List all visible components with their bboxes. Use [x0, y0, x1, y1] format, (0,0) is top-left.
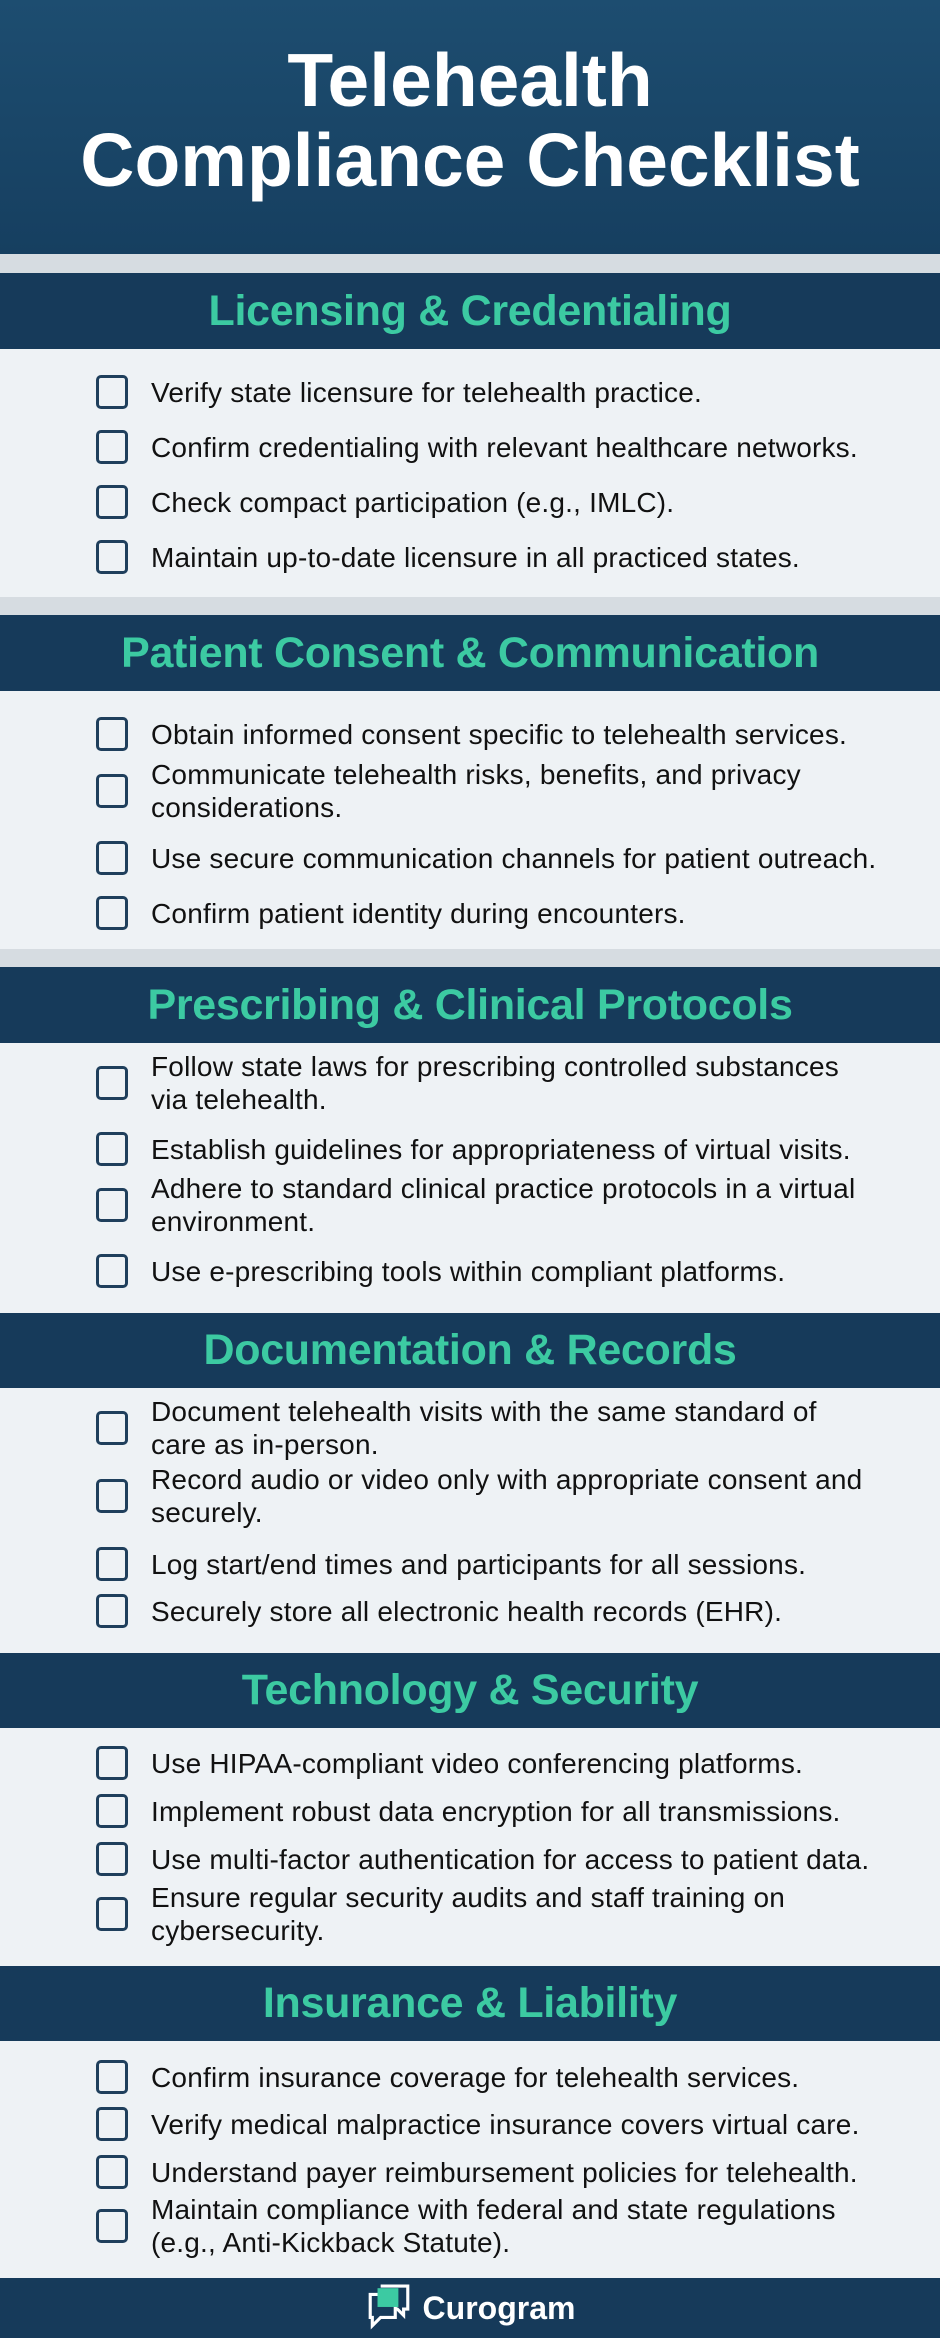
- item: considerations.: [151, 792, 342, 823]
- item: Adhere to standard clinical practice protocols in a virtual: [151, 1173, 855, 1204]
- panel: consent items: [0, 691, 940, 949]
- item: Use e-prescribing tools within compliant platforms.: [151, 1256, 785, 1286]
- header: Documentation & Records: Documentation & Records: [203, 1326, 737, 1374]
- header: Insurance & Liability: Insurance & Liability: [263, 1979, 677, 2027]
- item: Establish guidelines for appropriateness of virtual visits.: [151, 1134, 851, 1164]
- header: Patient Consent & Communication: Patient Consent & Communication: [121, 628, 819, 676]
- item: Check compact participation (e.g., IMLC).: [151, 486, 674, 518]
- header: Prescribing & Clinical Protocols: [0, 967, 940, 1043]
- item: Use HIPAA-compliant video conferencing platforms.: [151, 1748, 803, 1778]
- item: [96, 1464, 862, 1528]
- item: Implement robust data encryption for all transmissions.: [151, 1796, 841, 1826]
- item: Confirm credentialing with relevant healthcare networks.: [151, 432, 858, 462]
- header: Technology & Security: [0, 1653, 940, 1728]
- item: [96, 1051, 839, 1115]
- item: Maintain compliance with federal and state regulations: [151, 2194, 836, 2225]
- header: Patient Consent & Communication: [0, 615, 940, 691]
- panel: technology items: [0, 1728, 940, 1966]
- header: Licensing & Credentialing: [0, 273, 940, 349]
- panel: documentation items: [0, 1388, 940, 1653]
- item: Use multi-factor authentication for access to patient data.: [151, 1844, 869, 1874]
- title: Telehealth: [287, 38, 653, 122]
- header: Prescribing & Clinical Protocols: Prescribing & Clinical Protocols: [147, 980, 793, 1028]
- item: [96, 759, 801, 823]
- item: [96, 2194, 836, 2258]
- item: environment.: [151, 1206, 315, 1237]
- panel: licensing items: [0, 349, 940, 597]
- item: Document telehealth visits with the same standard of: [151, 1396, 817, 1427]
- title: Compliance Checklist: [80, 118, 860, 202]
- item: Communicate telehealth risks, benefits, and privacy: [151, 759, 801, 790]
- item: care as in-person.: [151, 1429, 379, 1460]
- panel: prescribing items: [0, 1043, 940, 1313]
- item: (e.g., Anti-Kickback Statute).: [151, 2227, 510, 2258]
- icon: chat logo: [368, 2284, 410, 2330]
- panel: insurance items: [0, 2041, 940, 2278]
- header: Insurance & Liability: [0, 1966, 940, 2041]
- item: Confirm insurance coverage for telehealth services.: [151, 2062, 799, 2092]
- item: [96, 1882, 785, 1946]
- item: Securely store all electronic health records (EHR).: [151, 1596, 782, 1626]
- item: via telehealth.: [151, 1084, 327, 1115]
- item: [96, 1173, 855, 1237]
- item: Record audio or video only with appropriate consent and: [151, 1464, 862, 1495]
- item: Maintain up-to-date licensure in all practiced states.: [151, 542, 800, 572]
- header: Licensing & Credentialing: Licensing & Credentialing: [209, 286, 731, 334]
- item: Confirm patient identity during encounters.: [151, 898, 686, 928]
- item: Log start/end times and participants for all sessions.: [151, 1548, 806, 1580]
- item: Ensure regular security audits and staff training on: [151, 1882, 785, 1913]
- item: cybersecurity.: [151, 1915, 324, 1946]
- header: Technology & Security: Technology & Security: [242, 1666, 698, 1714]
- title: [0, 0, 940, 254]
- item: Obtain informed consent specific to telehealth services.: [151, 718, 847, 750]
- item: securely.: [151, 1497, 263, 1528]
- item: Use secure communication channels for patient outreach.: [151, 842, 876, 874]
- header: Documentation & Records: [0, 1313, 940, 1388]
- footer: [0, 2278, 940, 2338]
- item: Verify medical malpractice insurance covers virtual care.: [151, 2108, 860, 2140]
- item: Verify state licensure for telehealth practice.: [151, 376, 702, 408]
- item: Understand payer reimbursement policies for telehealth.: [151, 2156, 858, 2188]
- item: Follow state laws for prescribing controlled substances: [151, 1051, 839, 1082]
- item: [96, 1396, 817, 1460]
- brand name: Curogram: [423, 2290, 575, 2326]
